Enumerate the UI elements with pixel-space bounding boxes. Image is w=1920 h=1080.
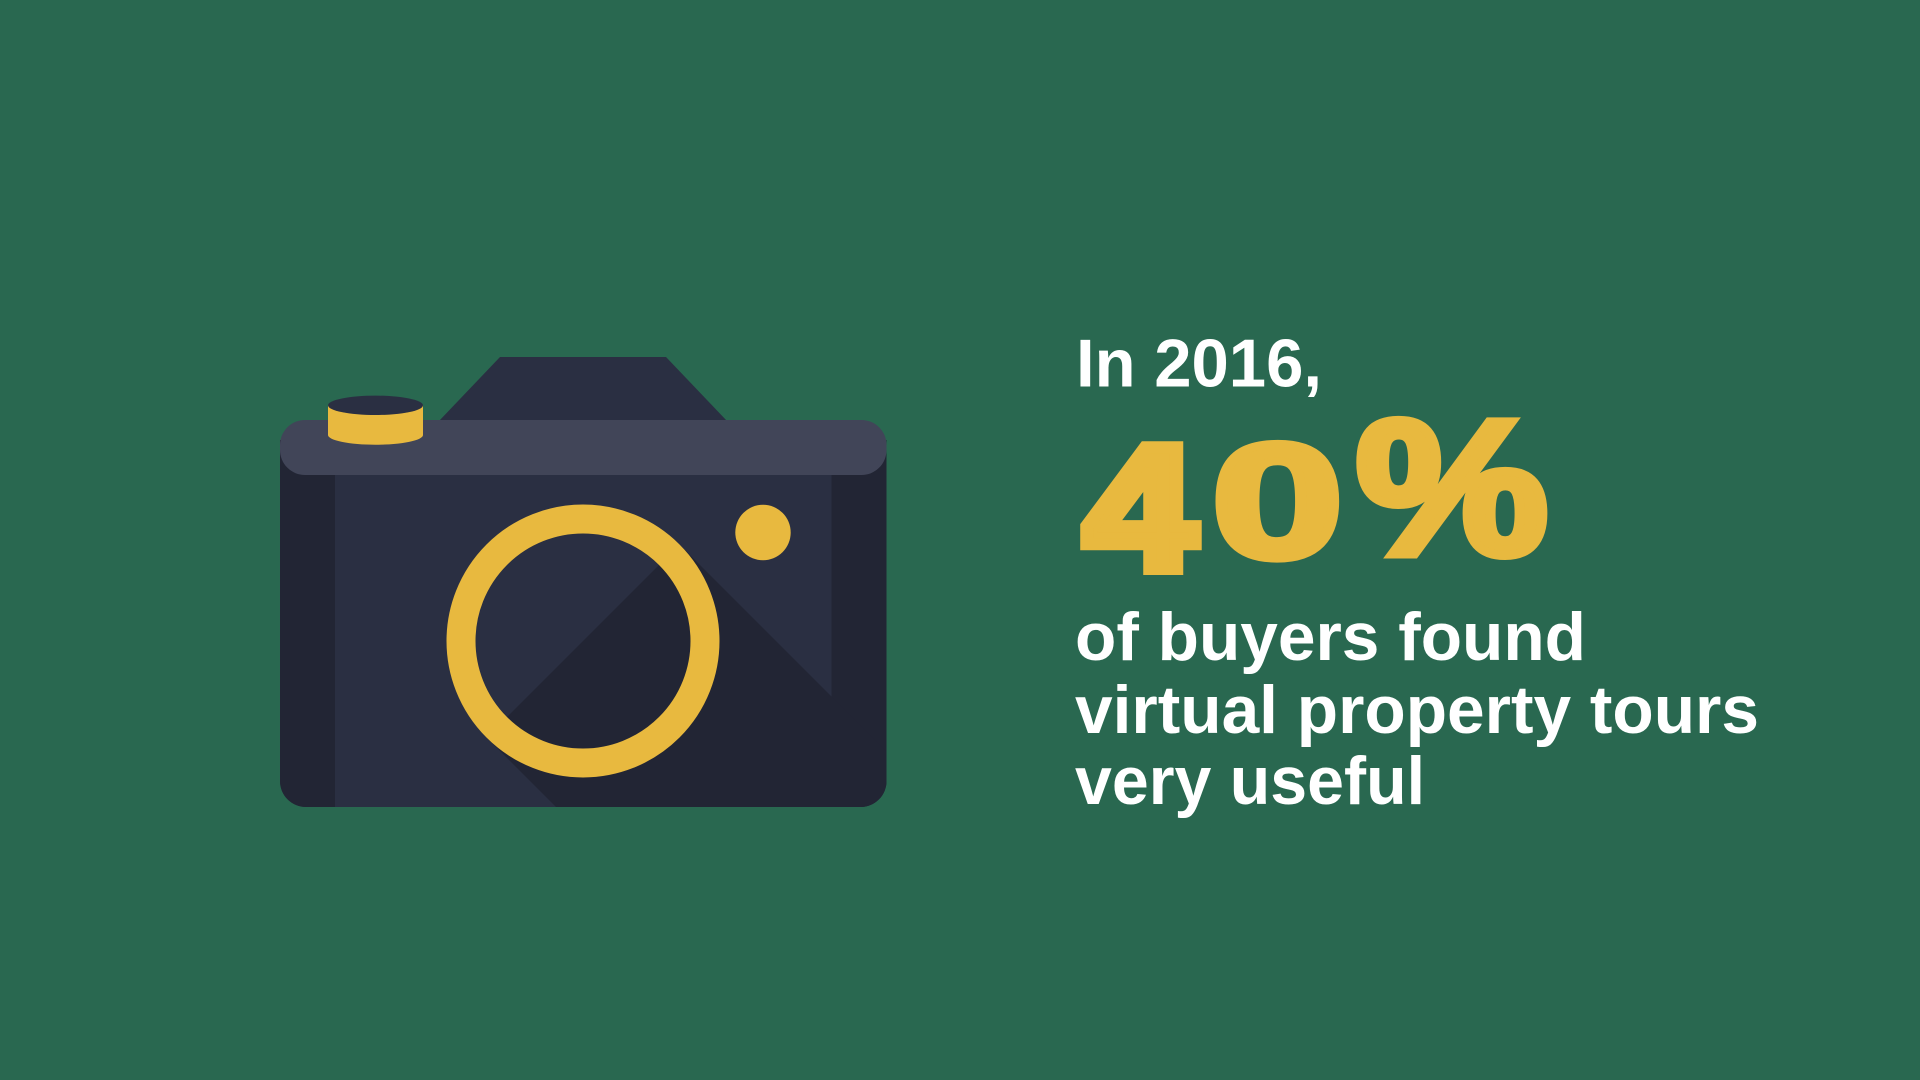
big number: 4 xyxy=(1084,409,1196,607)
flash xyxy=(735,505,791,560)
lens xyxy=(461,519,705,763)
statistic text block xyxy=(1075,326,1759,819)
description: of buyers found xyxy=(1075,599,1586,675)
camera viewfinder hump xyxy=(439,357,727,421)
camera body side shading xyxy=(280,440,890,810)
description: virtual property tours xyxy=(1075,672,1759,748)
intro line: In 2016, xyxy=(1076,326,1322,402)
big number: 0 xyxy=(1212,411,1343,592)
dial xyxy=(328,396,423,445)
camera body xyxy=(280,440,886,807)
icon: camera xyxy=(280,357,890,810)
big number: % xyxy=(1356,380,1548,595)
camera top band xyxy=(280,420,886,475)
description: very useful xyxy=(1075,743,1425,819)
description xyxy=(1075,599,1759,819)
